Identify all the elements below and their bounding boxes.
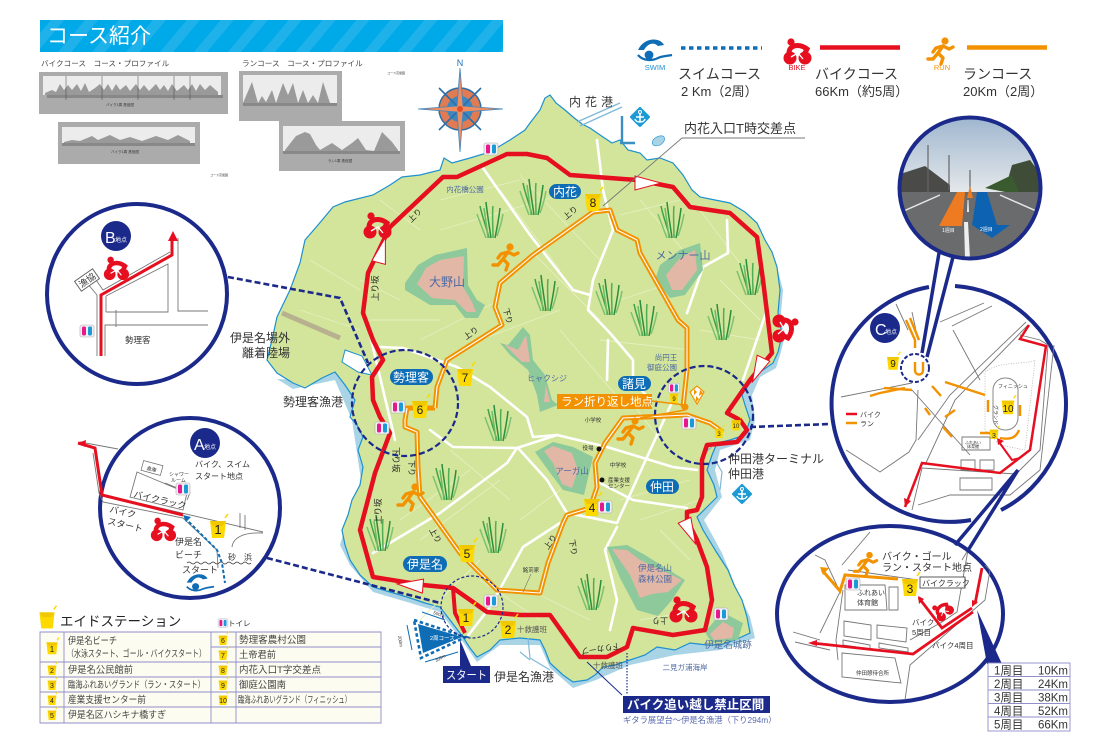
- slope labels: 上り: [427, 526, 443, 545]
- aid station table: 5: [50, 713, 54, 720]
- run turnaround label: [557, 386, 704, 418]
- course legend: BIKE: [788, 63, 806, 72]
- course legend: バイクコース: [815, 66, 898, 82]
- inset A: 1: [214, 522, 222, 537]
- place names: 産業支援: [608, 476, 630, 484]
- lap distance table: 66Km: [1038, 720, 1068, 732]
- photo inset: turnaround road: 2週目: [980, 226, 993, 233]
- aid station table: 10: [219, 698, 227, 705]
- direction arrows: [372, 176, 770, 593]
- district labels: 伊是名: [407, 556, 443, 572]
- mountain: Izena forest park: 伊是名山: [638, 563, 672, 573]
- aid station table: 3: [50, 683, 54, 690]
- harbour labels: 伊是名漁港: [494, 669, 554, 684]
- aid station markers: 2: [505, 623, 512, 637]
- district labels: 勢理客: [393, 370, 429, 384]
- slope labels: 上り坂: [370, 275, 380, 301]
- inset C: 地点: [885, 328, 897, 336]
- inset C: 9: [890, 359, 896, 370]
- district labels: 内花: [553, 185, 577, 199]
- place names: センター: [608, 482, 630, 490]
- aid station table: （水泳スタート、ゴール・バイクスタート）: [67, 648, 206, 660]
- inset: bike goal, run start: 5周目: [912, 628, 931, 637]
- aid station table: 産業支援センター前: [68, 694, 146, 706]
- inset C: フィニッシュ: [998, 384, 1028, 390]
- course legend: 66Km（約5周）: [815, 84, 908, 99]
- lap distance table: 38Km: [1038, 692, 1068, 704]
- aid station table: 7: [221, 653, 225, 660]
- aid station table: 勢理客農村公園: [239, 634, 306, 646]
- inset A: バイク: [109, 504, 137, 520]
- mountain: Izena forest park: 森林公園: [638, 574, 672, 584]
- inset C: C: [875, 322, 887, 339]
- inset: bike goal, run start: バイク4周目: [932, 641, 974, 650]
- slope labels: 下り: [501, 307, 514, 325]
- place names: 尚円王: [655, 352, 678, 362]
- inset A: バイクラック: [133, 489, 187, 511]
- aid station markers: 6: [417, 403, 424, 417]
- slope labels: 下り: [407, 460, 416, 476]
- aid station table: 8: [221, 668, 225, 675]
- course legend: スイムコース: [678, 66, 761, 82]
- course legend: 20Km（2周）: [963, 84, 1043, 99]
- aid station table: 6: [221, 638, 225, 645]
- photo inset: turnaround road: 1週目: [942, 227, 955, 234]
- harbour details: [520, 103, 753, 670]
- run course profiles: コース高低図: [387, 70, 405, 75]
- inset A: [78, 418, 280, 598]
- mountain: Aga: [535, 442, 593, 495]
- mountain: Hyakushiji: ヒャクシジ: [527, 374, 567, 383]
- no-overtaking notice: バイク追い越し禁止区間: [627, 697, 764, 712]
- inset A: 倉庫: [146, 465, 157, 474]
- mountain: Hyakushiji: [500, 327, 567, 412]
- district labels: 仲田: [650, 480, 674, 494]
- inset A: シャワー: [169, 472, 189, 478]
- inset A: 伊是名: [175, 536, 202, 547]
- aid station table: 伊是名区ハシキナ橋すぎ: [68, 709, 166, 721]
- compass rose: [418, 58, 503, 152]
- inset A: A: [194, 437, 205, 454]
- place names: 内花橋公園: [446, 184, 484, 194]
- aid station table: 1: [50, 645, 55, 654]
- place names: 中学校: [610, 461, 627, 469]
- inset C: 10: [1002, 404, 1014, 415]
- course legend: ランコース: [963, 66, 1032, 82]
- slope labels: 下り: [567, 539, 579, 556]
- aid station table: 臨海ふれあいグランド（フィニッシュ）: [238, 694, 351, 706]
- inset C: [830, 286, 1068, 522]
- bike and run icons on map: [364, 212, 799, 622]
- course legend: 2 Km（2周）: [681, 84, 758, 99]
- run course profiles: ランコース コース・プロファイル: [242, 59, 363, 68]
- harbour labels: [230, 95, 824, 684]
- place names: 伊是名城跡: [704, 639, 752, 651]
- start flag label: [443, 640, 490, 683]
- lap distance table: [977, 610, 1070, 732]
- bike course profiles: [39, 59, 228, 177]
- place names: 銘苅家: [523, 566, 540, 574]
- no-overtaking notice: ギタラ展望台～伊是名漁港（下り294m）: [623, 715, 777, 725]
- mountain: Aga: アーガ山: [555, 466, 589, 476]
- lap distance table: 1周目: [994, 664, 1023, 678]
- inset A: バイク、スイム: [195, 460, 250, 469]
- inset: bike goal, run start: 仲田憩待合所: [856, 669, 890, 677]
- lap distance table: 4周目: [994, 705, 1023, 718]
- inset C: 体育館: [967, 443, 979, 449]
- run turnaround label: ラン折り返し地点: [561, 394, 653, 408]
- slope labels: 上り: [542, 533, 559, 551]
- harbour labels: 仲田港: [728, 467, 764, 481]
- inset B: 地点: [115, 236, 127, 244]
- slope labels: [370, 204, 668, 656]
- slope labels: 下り坂: [391, 447, 401, 473]
- aid station markers: 4: [589, 501, 596, 515]
- dashed zoom circles: [352, 350, 753, 638]
- place names: 役場: [582, 444, 594, 452]
- aid station markers: 10: [733, 424, 740, 430]
- swim course triangle: 200m: [397, 635, 404, 648]
- run course profiles: [239, 59, 405, 171]
- aid station table: 2: [50, 668, 54, 675]
- course legend: SWIM: [645, 63, 665, 72]
- aid station markers: [412, 187, 742, 638]
- bike route: [360, 154, 772, 657]
- place names: [446, 184, 752, 672]
- start flag label: スタート: [446, 669, 487, 682]
- place names: 御庭公園: [647, 362, 677, 372]
- compass rose: N: [457, 58, 463, 68]
- harbour labels: 離着陸場: [242, 345, 290, 360]
- slope labels: 上り: [652, 616, 668, 625]
- slope labels: 下りカーブ: [581, 641, 621, 656]
- inset A: 地点: [204, 443, 216, 451]
- slope labels: 上り坂: [373, 498, 383, 524]
- aid station heading: エイドステーション: [60, 614, 181, 629]
- aid station table: 内花入口T字交差点: [239, 664, 321, 676]
- district labels: [390, 184, 679, 572]
- pointer: C to goal inset: [955, 470, 1018, 552]
- course legend: [638, 37, 1047, 99]
- dashed leader from C inset: [750, 424, 830, 427]
- place names: 小学校: [585, 416, 602, 424]
- island map: [267, 95, 799, 688]
- aid station table: 伊是名公民館前: [68, 664, 133, 676]
- inset C: ふれあい: [965, 439, 981, 445]
- place names: 十救護班: [517, 624, 547, 634]
- aid station markers: 5: [464, 547, 471, 561]
- inset B: B: [105, 230, 116, 247]
- bike course profiles: コース高低図: [210, 172, 228, 177]
- aid station table: 9: [221, 683, 225, 690]
- no-overtaking notice: [587, 653, 777, 725]
- mountain: Menna: [655, 243, 710, 298]
- bike course profiles: バイク1周 高低図: [111, 149, 139, 154]
- inset: bike goal, run start: バイクラック: [922, 579, 970, 588]
- aid station table: [40, 632, 381, 723]
- swim course triangle: 300m: [434, 653, 447, 663]
- inset A: ビーチ: [175, 550, 202, 560]
- mountain: Menna: メンナー山: [656, 249, 710, 262]
- aid station table: 土帝君前: [239, 649, 276, 661]
- run route: [405, 210, 723, 593]
- inset: bike goal, run start: バイク: [912, 618, 934, 627]
- swim course triangle: 2周コース: [430, 635, 455, 642]
- inset C: グランド: [992, 405, 999, 425]
- inset: bike goal, run start: ラン・スタート地点: [882, 561, 972, 574]
- inset A: 砂 浜: [228, 552, 252, 562]
- callout: Uchihana junction: [603, 121, 805, 206]
- aid station heading: トイレ: [228, 619, 250, 628]
- title banner: [40, 20, 503, 52]
- dashed leader from B inset: [228, 277, 368, 363]
- mountain: Ono: [405, 248, 485, 318]
- harbour labels: 内花港: [569, 95, 617, 109]
- title banner: コース紹介: [47, 25, 151, 48]
- lap distance table: 10Km: [1038, 666, 1068, 678]
- harbour labels: 勢理客漁港: [283, 394, 343, 409]
- aid station table: 御庭公園南: [239, 679, 286, 691]
- swim course triangle: 500m: [433, 610, 445, 619]
- lap distance table: 52Km: [1038, 706, 1068, 718]
- inset: bike goal, run start: ふれあい: [857, 589, 885, 597]
- inset B: 漁協: [76, 270, 98, 290]
- aid station markers: 8: [590, 196, 597, 210]
- aid station table: 臨海ふれあいグランド（ラン・スタート）: [68, 679, 205, 691]
- inset: bike goal, run start: [777, 526, 1003, 702]
- lap distance table: 24Km: [1038, 679, 1068, 691]
- inset B: 勢理客: [125, 335, 151, 345]
- aid station table: 4: [50, 698, 54, 705]
- mountain: Izena forest park: [607, 545, 685, 616]
- inset A: スタート: [107, 516, 144, 534]
- district labels: 諸見: [622, 376, 646, 391]
- slope labels: 上り: [406, 207, 424, 224]
- harbour labels: 伊是名場外: [230, 330, 290, 345]
- place names: 十救護班: [593, 660, 623, 670]
- aid station markers: 7: [462, 371, 469, 385]
- inset: bike goal, run start: 体育館: [857, 598, 878, 607]
- pampas grass: [367, 179, 763, 610]
- toilets on map: [375, 143, 728, 620]
- run course profiles: ラン1周 高低図: [328, 158, 353, 163]
- inset C: ラン: [860, 420, 874, 428]
- aid station markers: 1: [463, 611, 470, 625]
- inset B: [47, 204, 227, 384]
- slope labels: 上り: [462, 325, 480, 342]
- callout: Uchihana junction: 内花入口T時交差点: [684, 121, 796, 136]
- inset A: スタート地点: [195, 471, 243, 481]
- inset C: 3: [992, 433, 996, 440]
- bike course profiles: バイクコース コース・プロファイル: [41, 59, 170, 68]
- lap distance table: 3周目: [994, 692, 1023, 704]
- bike course profiles: バイク1周 高低図: [106, 102, 134, 107]
- aid station table: 伊是名ビーチ: [68, 635, 117, 647]
- lap distance table: 5周目: [994, 718, 1023, 732]
- slope labels: 上り: [562, 204, 580, 222]
- castle ruins hill: [705, 612, 743, 643]
- photo inset: turnaround road: [897, 117, 1045, 262]
- inset: bike goal, run start: バイク・ゴール: [882, 550, 952, 563]
- place names: 二見ガ浦海岸: [662, 662, 708, 672]
- mountain: Ono: 大野山: [429, 275, 465, 289]
- inset: bike goal, run start: 3: [907, 582, 914, 596]
- harbour labels: 仲田港ターミナル: [728, 452, 824, 466]
- swim course triangle: [397, 610, 466, 663]
- inset A: ルーム: [171, 478, 186, 484]
- inset C: バイク: [860, 411, 881, 419]
- lap distance table: 2周目: [994, 678, 1023, 691]
- aid station markers: 3: [717, 432, 721, 438]
- inset A: スタート: [182, 565, 218, 575]
- aid station heading: [39, 606, 251, 629]
- dashed leader from A inset: [267, 558, 440, 603]
- pointer: photo to C: [922, 253, 953, 357]
- course legend: RUN: [934, 63, 950, 72]
- aid station markers: 9: [672, 397, 676, 403]
